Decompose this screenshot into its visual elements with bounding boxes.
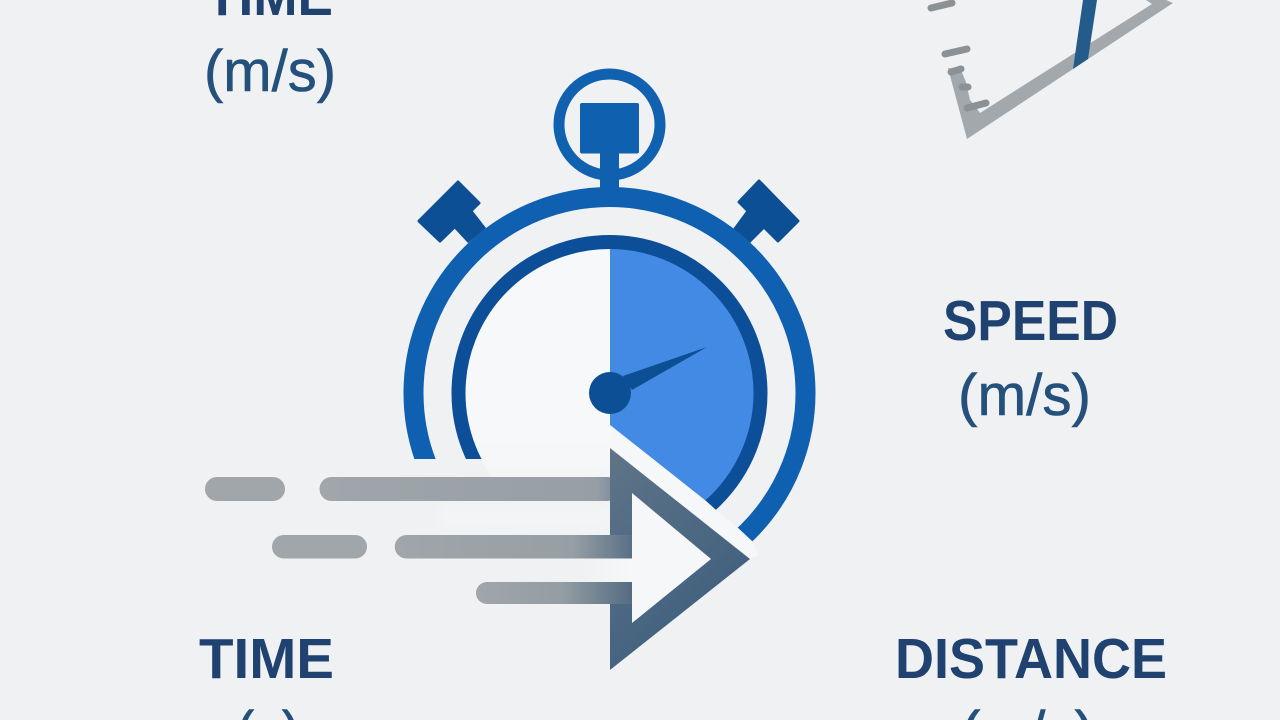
blue sector [610,248,754,501]
icon: stopwatch [414,74,806,589]
label: speed [943,289,1118,428]
label: top time: (m/s) [204,39,336,104]
label: distance [895,627,1167,720]
left side button [419,182,486,243]
outer ring [414,197,806,589]
arrow head outline [610,448,750,670]
label: speed: (m/s) [958,363,1091,428]
label: top time [204,0,336,104]
icon: ruler and set square [931,0,1173,139]
needle and hub [589,347,707,414]
motion lines [205,477,632,604]
right side button [733,181,798,243]
arrow inner fill [632,493,711,623]
label: speed: SPEED [943,289,1118,353]
inner ring [458,242,760,544]
label: distance: DISTANCE [895,627,1167,691]
white halo behind arrow [610,425,758,559]
soft light area under dial [440,505,610,531]
speed arrow [205,448,750,670]
stopwatch crown [559,74,660,192]
white dial face [465,248,610,477]
label: bottom time [199,627,334,720]
label: bottom time: TIME [199,627,334,691]
